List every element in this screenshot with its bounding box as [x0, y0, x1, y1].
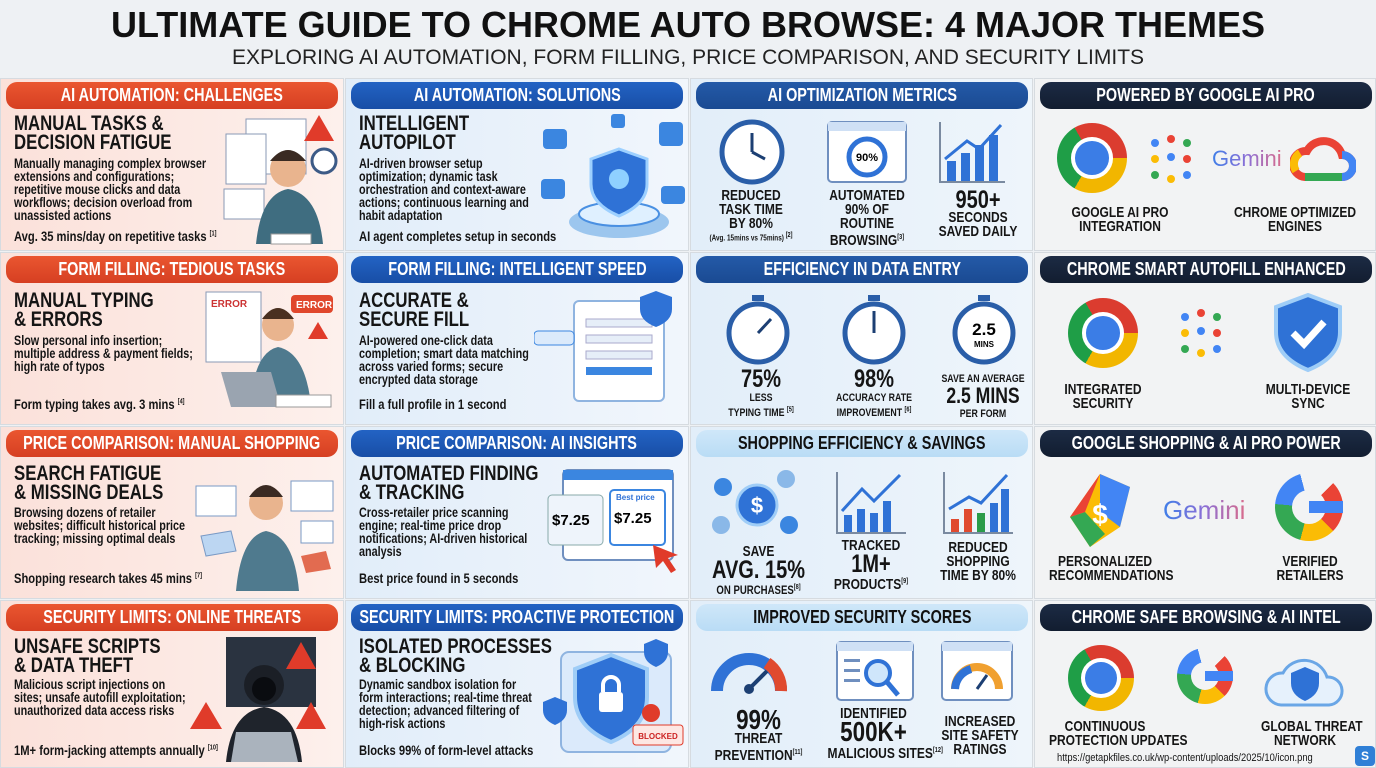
panel: security proactive [345, 600, 689, 768]
stat: automated 90%: ROUTINE [840, 215, 894, 232]
icon: coins [712, 470, 798, 534]
icon: stopwatch 2.5: MINS [974, 340, 995, 349]
label: multi-device sync [1266, 381, 1350, 412]
stat: 98%: IMPROVEMENT [6] [837, 406, 911, 419]
header [351, 82, 683, 109]
heading: AUTOMATED FINDING [359, 462, 539, 485]
icon: bar chart [939, 122, 1005, 183]
icon: stopwatch 2 [842, 295, 906, 364]
label: chrome optimized engines [1234, 204, 1356, 235]
heading [14, 289, 154, 331]
icon: browser 90%: 90% [856, 152, 878, 164]
stat: 75%: TYPING TIME [5] [728, 406, 794, 419]
stat: 2.5 mins [941, 373, 1025, 420]
label: continuous protection updates: CONTINUOUS [1065, 718, 1145, 735]
panel: security threats [0, 600, 344, 768]
stat: reduced task time [709, 187, 793, 243]
stat: tracked 1M+: TRACKED [842, 537, 900, 554]
header [351, 256, 683, 283]
icon: price compare window: Best price [616, 493, 655, 502]
icon: logo badge: S [1361, 749, 1369, 763]
header: CHROME SAFE BROWSING & AI INTEL [1071, 607, 1341, 627]
body: Malicious script injections on sites; unsafe autofill exploitation; unauthorized data access risks [14, 677, 186, 718]
label: personalized recommendations: PERSONALIZED [1058, 553, 1152, 570]
illustration: typing user [206, 292, 333, 408]
stat: increased site safety: SITE SAFETY [941, 727, 1019, 744]
header: FORM FILLING: INTELLIGENT SPEED [388, 259, 646, 279]
stat: save 15% [712, 543, 805, 597]
stat: automated 90%: BROWSING[3] [830, 232, 904, 249]
stat: tracked 1M+: 1M+ [851, 550, 891, 578]
label: global threat network: GLOBAL THREAT [1261, 718, 1363, 735]
header: PRICE COMPARISON: MANUAL SHOPPING [23, 433, 321, 453]
header [696, 82, 1028, 109]
icon: price compare window: $7.25 [552, 512, 590, 529]
heading: & TRACKING [359, 481, 464, 504]
icon: price compare window: $7.25 [614, 510, 652, 527]
header: PRICE COMPARISON: AI INSIGHTS [397, 433, 637, 453]
icon: gemini: Gemini [1163, 495, 1245, 525]
stat: Shopping research takes 45 mins [7] [14, 570, 202, 586]
icon: logo badge [1355, 746, 1375, 766]
panel: ai automation challenges [0, 78, 344, 251]
panel: chrome safe browsing [1034, 600, 1376, 768]
header: SHOPPING EFFICIENCY & SAVINGS [738, 433, 986, 453]
stat: 950+ seconds [939, 186, 1018, 240]
stat: reduced task time: REDUCED [721, 187, 781, 204]
label: verified retailers: VERIFIED [1282, 553, 1338, 570]
stat: reduced task time: TASK TIME [719, 201, 783, 218]
header: EFFICIENCY IN DATA ENTRY [763, 259, 961, 279]
stat: increased site safety: INCREASED [945, 713, 1015, 730]
header [696, 430, 1028, 457]
icon: shield platform [541, 114, 685, 238]
icon: stopwatch 2.5: 2.5 [972, 320, 996, 339]
heading [359, 112, 469, 154]
label: verified retailers [1266, 555, 1354, 583]
header: GOOGLE SHOPPING & AI PRO POWER [1071, 433, 1341, 453]
stat: 950+ seconds: 950+ [955, 186, 1001, 214]
icon: shield check [1274, 293, 1342, 372]
stat: 75%: LESS [750, 392, 772, 404]
stat: reduced shopping time [934, 541, 1022, 583]
panel: improved security scores [690, 600, 1033, 768]
stat: 98%: 98% [854, 365, 894, 393]
heading: ISOLATED PROCESSES [359, 635, 552, 658]
header: CHROME SMART AUTOFILL ENHANCED [1067, 259, 1345, 279]
stat: Avg. 35 mins/day on repetitive tasks [1] [14, 228, 217, 244]
icon: cloud [1290, 137, 1356, 181]
icon: google G [1275, 473, 1343, 541]
body: Browsing dozens of retailer websites; difficult historical price tracking; missing optimal deals [14, 505, 185, 546]
label: google ai pro integration: INTEGRATION [1079, 218, 1161, 235]
icon: form with shield [534, 291, 672, 402]
icon: dots [1181, 309, 1221, 357]
stat: 950+ seconds: SECONDS [948, 209, 1008, 226]
stat: reduced shopping time: REDUCED [948, 539, 1008, 556]
icon: browser search [836, 641, 916, 703]
stat: Best price found in 5 seconds [359, 570, 518, 586]
heading: AUTOPILOT [359, 131, 456, 154]
label: verified retailers: RETAILERS [1276, 567, 1344, 584]
stat: 99%: THREAT [735, 730, 782, 747]
stat: save 15%: AVG. 15% [712, 556, 805, 584]
header [1040, 604, 1372, 631]
body: AI-driven browser setup optimization; dynamic task orchestration and context-aware actions; continuous learning and habit adaptation [359, 156, 529, 223]
illustration: typing user: ERROR [211, 299, 248, 310]
stat: increased site safety [938, 715, 1022, 757]
icon: stopwatch 1 [726, 295, 790, 364]
icon: chart colored [943, 472, 1013, 534]
stat: tracked 1M+: PRODUCTS[9] [834, 576, 908, 593]
icon: shield lock: BLOCKED [638, 732, 678, 741]
body: Dynamic sandbox isolation for form interactions; real-time threat detection; advanced filtering of high-risk actions [359, 677, 532, 731]
heading: ACCURATE & [359, 289, 469, 312]
header: AI OPTIMIZATION METRICS [767, 85, 957, 105]
heading: & DATA THEFT [14, 654, 133, 677]
icon: price tag [1065, 472, 1135, 552]
label: google ai pro integration: GOOGLE AI PRO [1072, 204, 1168, 221]
heading [14, 637, 161, 675]
body: Manually managing complex browser extensions and configurations; repetitive mouse clicks and data workflows; decision overload from unassisted actions [14, 156, 206, 223]
header: AI AUTOMATION: SOLUTIONS [414, 85, 620, 105]
heading: MANUAL TASKS & [14, 112, 164, 135]
heading [359, 462, 539, 504]
heading: INTELLIGENT [359, 112, 469, 135]
icon: chrome [1068, 645, 1134, 711]
stat: automated 90%: AUTOMATED [829, 187, 905, 204]
panel: price comparison ai insights [345, 426, 689, 599]
heading: SECURE FILL [359, 308, 469, 331]
label: chrome optimized engines: CHROME OPTIMIZED [1234, 204, 1356, 221]
icon: chrome [1057, 123, 1127, 193]
stat: AI agent completes setup in seconds [359, 228, 556, 244]
stat: increased site safety: RATINGS [953, 741, 1007, 758]
stat: 99% [712, 709, 804, 763]
header [696, 256, 1028, 283]
stat: 98% [836, 365, 912, 419]
stat: save 15%: ON PURCHASES[8] [716, 583, 801, 597]
stat: 75%: 75% [741, 365, 781, 393]
stat: tracked 1M+ [834, 537, 908, 593]
heading: SEARCH FATIGUE [14, 462, 161, 485]
icon: gemini: Gemini [1212, 146, 1282, 171]
header: AI AUTOMATION: CHALLENGES [61, 85, 283, 105]
icon: cloud shield [1263, 643, 1347, 709]
icon: chart up [836, 472, 906, 534]
icon: price compare window [548, 469, 678, 573]
panel: form filling tedious [0, 252, 344, 425]
stat: 500K+: MALICIOUS SITES[12] [828, 745, 943, 762]
label: continuous protection updates: PROTECTION UPDATES [1049, 732, 1187, 749]
stat: 500K+ [828, 707, 920, 761]
source url: https://getapkfiles.co.uk/wp-content/uploads/2025/10/icon.png [1057, 752, 1313, 764]
panel: google shopping [1034, 426, 1376, 599]
stat: 500K+: 500K+ [840, 716, 907, 747]
header [6, 430, 338, 457]
icon: google G [1177, 648, 1233, 704]
heading [359, 289, 469, 331]
stat: 98%: ACCURACY RATE [836, 392, 912, 404]
label: google ai pro integration [1072, 204, 1168, 235]
heading: DECISION FATIGUE [14, 131, 171, 154]
label: integrated security [1064, 381, 1142, 412]
panel: efficiency in data entry [690, 252, 1033, 425]
panel: chrome smart autofill [1034, 252, 1376, 425]
stat: automated 90% [829, 187, 905, 249]
header: SECURITY LIMITS: ONLINE THREATS [43, 607, 301, 627]
icon: chrome [1068, 298, 1138, 368]
stat: 1M+ form-jacking attempts annually [10] [14, 742, 218, 758]
stat: reduced task time: (Avg. 15mins vs 75mins) [2] [709, 232, 793, 243]
header [696, 604, 1028, 631]
panel: price comparison manual [0, 426, 344, 599]
panel: powered by google ai pro [1034, 78, 1376, 251]
illustration: typing user: ERROR [296, 300, 333, 311]
title: ULTIMATE GUIDE TO CHROME AUTO BROWSE: 4 MAJOR THEMES [111, 4, 1265, 45]
stat: reduced shopping time: SHOPPING [946, 553, 1010, 570]
icon: stopwatch 2.5 [952, 295, 1016, 364]
stat: automated 90%: 90% OF [845, 201, 889, 218]
heading [359, 637, 552, 675]
header [1040, 82, 1372, 109]
stat: Blocks 99% of form-level attacks [359, 742, 533, 758]
icon: gauge [709, 639, 789, 695]
icon: browser gauge [941, 641, 1013, 703]
heading: & ERRORS [14, 308, 103, 331]
label: global threat network: NETWORK [1274, 732, 1336, 749]
header [6, 604, 338, 631]
panel: shopping efficiency [690, 426, 1033, 599]
stat: save 15%: SAVE [743, 543, 774, 560]
body: AI-powered one-click data completion; smart data matching across varied forms; secure encrypted data storage [359, 333, 529, 387]
heading [14, 462, 163, 504]
stat: 500K+: IDENTIFIED [840, 705, 907, 722]
heading: & BLOCKING [359, 654, 465, 677]
panel: ai automation solutions [345, 78, 689, 251]
header: POWERED BY GOOGLE AI PRO [1097, 85, 1315, 105]
stat: 2.5 mins: SAVE AN AVERAGE [941, 373, 1025, 385]
header [351, 430, 683, 457]
icon: coins: $ [751, 493, 763, 518]
stat: reduced task time: BY 80% [729, 215, 773, 232]
icon: clock [720, 120, 784, 184]
header [6, 256, 338, 283]
label: global threat network [1261, 720, 1349, 748]
stat: 2.5 mins: 2.5 MINS [946, 383, 1020, 408]
panel: ai optimization metrics [690, 78, 1033, 251]
illustration: hacker [186, 637, 341, 767]
heading [14, 112, 171, 154]
header [1040, 256, 1372, 283]
body: Slow personal info insertion; multiple address & payment fields; high rate of typos [14, 333, 193, 374]
label: multi-device sync: SYNC [1291, 395, 1325, 412]
panel: form filling intelligent speed [345, 252, 689, 425]
label: integrated security: INTEGRATED [1064, 381, 1142, 398]
label: multi-device sync: MULTI-DEVICE [1266, 381, 1350, 398]
subtitle: EXPLORING AI AUTOMATION, FORM FILLING, PRICE COMPARISON, AND SECURITY LIMITS [232, 46, 1144, 69]
stat: reduced shopping time: TIME BY 80% [940, 567, 1016, 584]
stat: 99%: PREVENTION[11] [715, 747, 802, 764]
header [1040, 430, 1372, 457]
stat: Form typing takes avg. 3 mins [4] [14, 396, 185, 412]
label: integrated security: SECURITY [1073, 395, 1133, 412]
icon: price tag: $ [1092, 499, 1108, 530]
label: continuous protection updates [1049, 720, 1161, 748]
icon: shield lock [541, 637, 686, 765]
header [6, 82, 338, 109]
body: Cross-retailer price scanning engine; real-time price drop notifications; AI-driven historical analysis [359, 505, 527, 559]
stat: Fill a full profile in 1 second [359, 396, 506, 412]
label: personalized recommendations [1049, 555, 1161, 583]
stat: 99%: 99% [736, 704, 781, 735]
header: IMPROVED SECURITY SCORES [753, 607, 971, 627]
heading: MANUAL TYPING [14, 289, 154, 312]
stat: 2.5 mins: PER FORM [960, 408, 1006, 420]
icon: browser 90% [827, 121, 907, 183]
stat: 75% [728, 365, 794, 419]
stat: 950+ seconds: SAVED DAILY [939, 223, 1017, 240]
heading: UNSAFE SCRIPTS [14, 635, 161, 658]
header: SECURITY LIMITS: PROACTIVE PROTECTION [360, 607, 674, 627]
header: FORM FILLING: TEDIOUS TASKS [59, 259, 285, 279]
label: chrome optimized engines: ENGINES [1268, 218, 1322, 235]
heading: & MISSING DEALS [14, 481, 163, 504]
icon: dots [1151, 135, 1191, 183]
illustration: shopper [196, 480, 334, 591]
label: personalized recommendations: RECOMMENDATIONS [1049, 567, 1173, 584]
illustration: stressed user [224, 115, 338, 244]
